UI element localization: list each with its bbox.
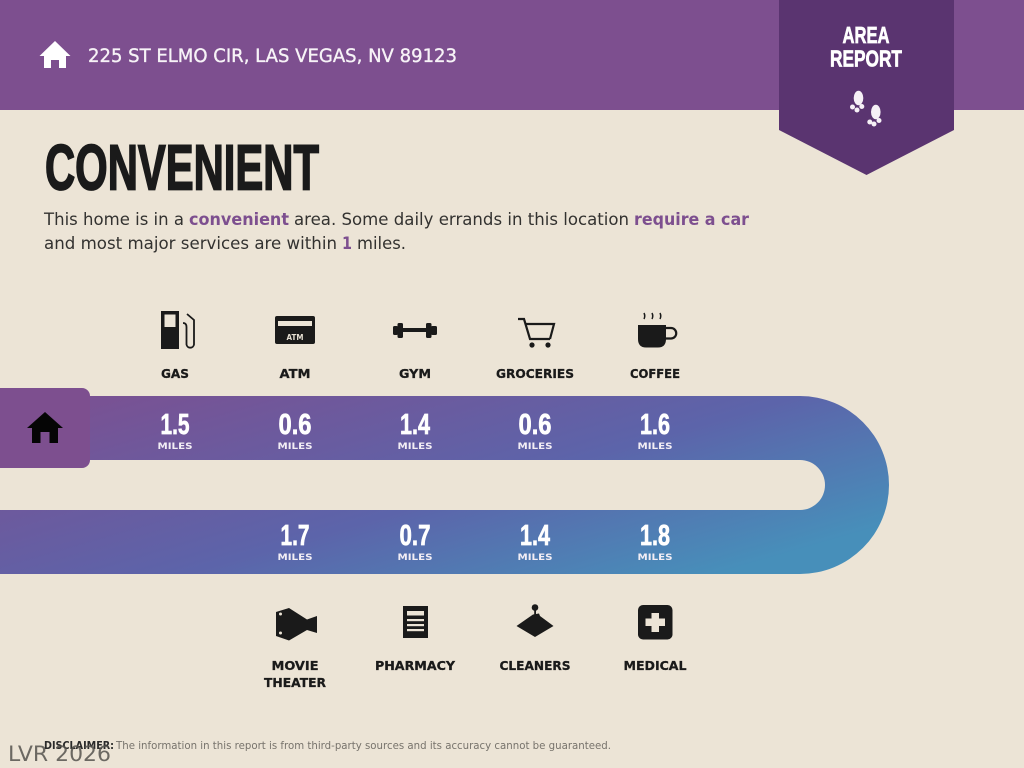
route track xyxy=(0,396,889,574)
icon: pharmacy xyxy=(403,606,428,638)
bottom labels: PHARMACY xyxy=(375,658,456,673)
intro text: convenient xyxy=(189,210,289,230)
top labels xyxy=(161,366,680,381)
top distances: 1.5 xyxy=(160,409,190,441)
top distances: 1.4 xyxy=(400,409,430,441)
bottom labels xyxy=(264,658,687,690)
icon: home xyxy=(40,41,70,68)
disclaimer: DISCLAIMER: xyxy=(44,739,114,752)
top labels: GAS xyxy=(161,366,189,381)
icon: gym xyxy=(393,323,437,338)
top distances: 0.6 xyxy=(278,409,312,441)
intro text: require a car xyxy=(634,210,750,230)
top distances: MILES xyxy=(518,442,552,452)
address: 225 ST ELMO CIR, LAS VEGAS, NV 89123 xyxy=(88,45,457,67)
bottom distances: MILES xyxy=(278,553,312,563)
bottom distances: MILES xyxy=(518,553,552,563)
icon: coffee xyxy=(638,313,676,348)
top distances: 0.6 xyxy=(518,409,552,441)
bottom distances: 1.4 xyxy=(520,520,550,552)
top labels: GROCERIES xyxy=(496,366,574,381)
intro text xyxy=(43,210,750,254)
icon: cleaners xyxy=(516,604,554,637)
intro text: area. Some daily errands in this location xyxy=(294,210,629,230)
title: CONVENIENT xyxy=(45,132,319,204)
top distances: MILES xyxy=(638,442,672,452)
header band xyxy=(0,0,1024,110)
bottom distances: 0.7 xyxy=(400,520,430,552)
ribbon title xyxy=(830,22,902,72)
bottom labels: THEATER xyxy=(264,675,326,690)
intro text: miles. xyxy=(357,234,406,254)
ribbon title: AREA xyxy=(842,22,890,48)
bottom distances: 1.8 xyxy=(640,520,670,552)
icon: atm: ATM xyxy=(286,333,304,342)
icon: movie theater xyxy=(276,608,317,640)
top labels: COFFEE xyxy=(630,366,680,381)
bottom distances: MILES xyxy=(638,553,672,563)
bottom labels: CLEANERS xyxy=(500,658,570,673)
icon: atm xyxy=(275,316,315,344)
bottom distances: MILES xyxy=(398,553,432,563)
top distances: 1.6 xyxy=(640,409,670,441)
top distances: MILES xyxy=(398,442,432,452)
bottom distances xyxy=(278,520,672,563)
intro text: 1 xyxy=(342,234,352,254)
icon: footprints xyxy=(850,91,882,126)
top distances: MILES xyxy=(278,442,312,452)
area report ribbon xyxy=(779,0,954,175)
bottom distances: 1.7 xyxy=(280,520,310,552)
intro text: and most major services are within xyxy=(44,234,337,254)
home marker xyxy=(0,388,90,468)
icon: gas xyxy=(161,311,194,349)
bottom labels: MEDICAL xyxy=(624,658,687,673)
icon: medical xyxy=(638,605,672,640)
icon: home black xyxy=(27,412,63,443)
top labels: GYM xyxy=(399,366,431,381)
top distances xyxy=(158,409,672,452)
top labels: ATM xyxy=(280,366,310,381)
intro text: This home is in a xyxy=(43,210,184,230)
disclaimer: The information in this report is from third-party sources and its accuracy cannot be guaranteed. xyxy=(115,739,611,752)
top distances: MILES xyxy=(158,442,192,452)
icon: groceries xyxy=(518,319,554,348)
watermark: LVR 2026 xyxy=(8,742,111,766)
bottom labels: MOVIE xyxy=(272,658,318,673)
ribbon title: REPORT xyxy=(830,46,902,72)
